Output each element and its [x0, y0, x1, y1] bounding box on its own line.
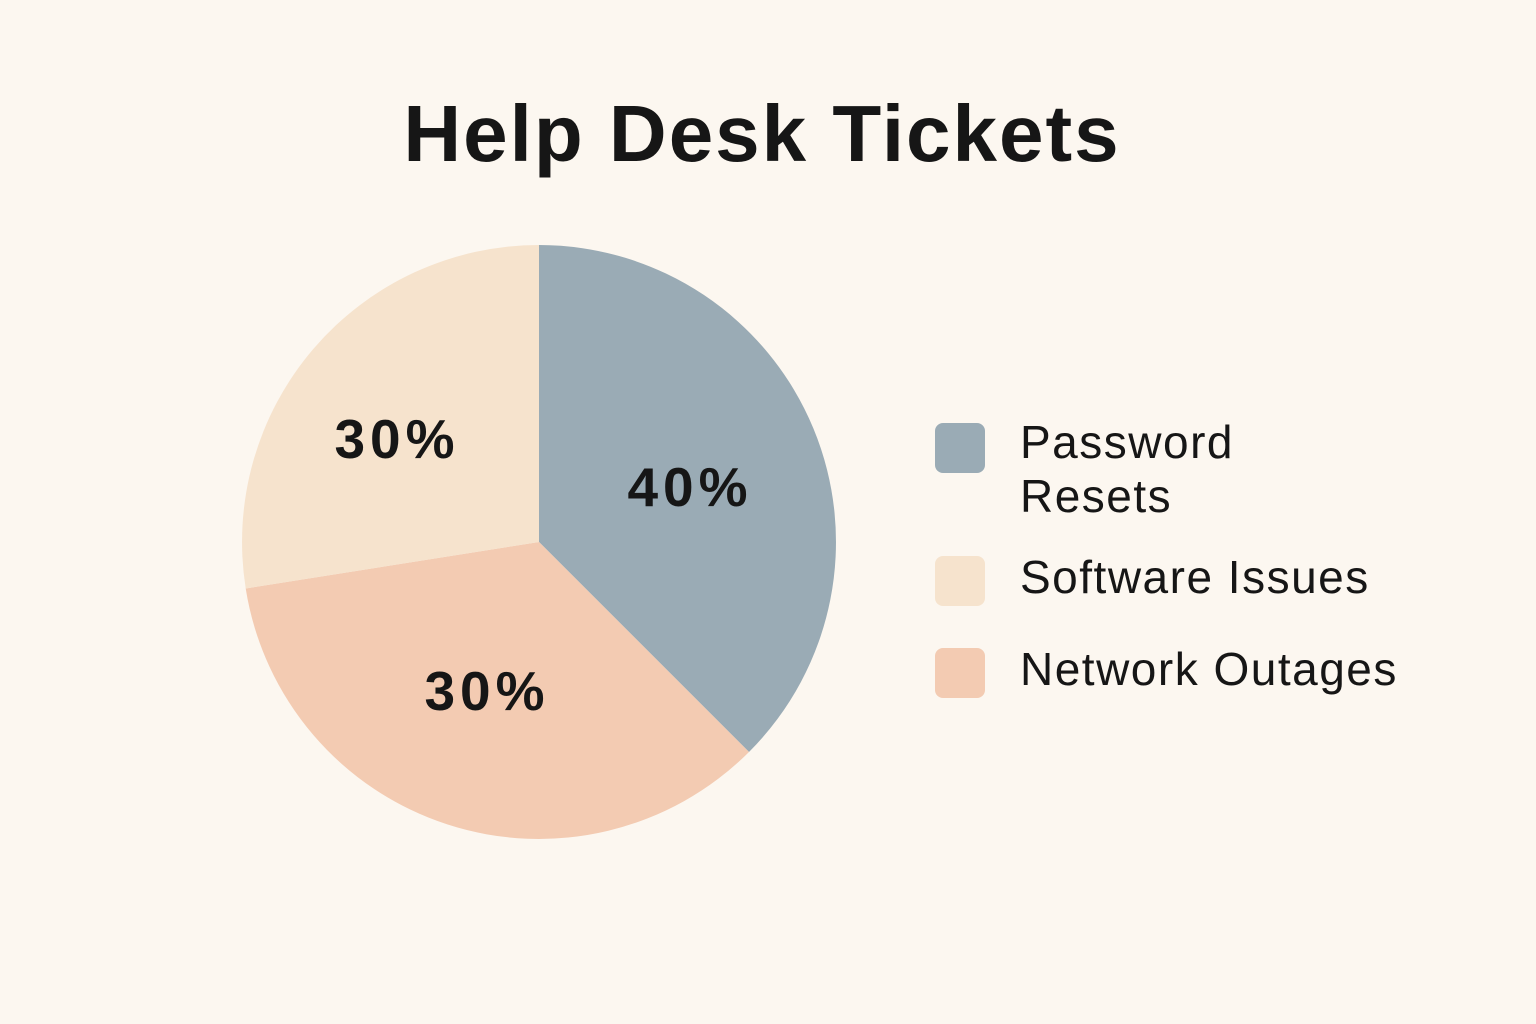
slice: software issues 30%: 30%: [334, 408, 460, 470]
legend item: software issues: Software Issues: [1020, 551, 1370, 603]
slice: software issues 30%: [242, 245, 539, 588]
title: Help Desk Tickets: [403, 89, 1121, 178]
legend item: password resets: Password: [1020, 416, 1234, 468]
legend item: password resets: Resets: [1020, 470, 1172, 522]
legend item: password resets: [935, 416, 1234, 522]
slice: password resets 40%: 40%: [627, 456, 753, 518]
legend item: network outages: Network Outages: [1020, 643, 1398, 695]
slice: password resets 40%: [539, 245, 836, 752]
legend: [935, 416, 1398, 698]
slice: network outages 30%: 30%: [424, 660, 550, 722]
slice: network outages 30%: [246, 542, 749, 839]
